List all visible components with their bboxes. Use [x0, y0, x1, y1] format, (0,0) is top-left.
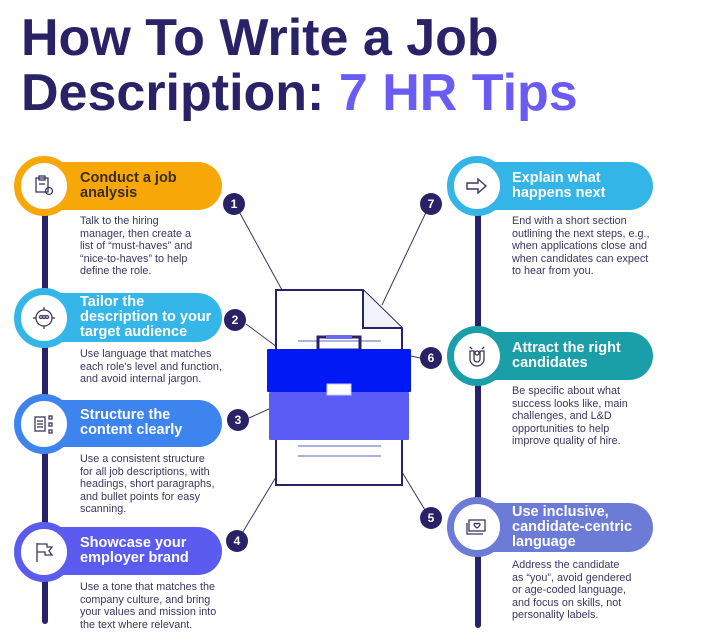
text 5: Address the candidate — [512, 559, 619, 571]
heading 6: Attract the right — [512, 340, 621, 356]
text 6: Be specific about what — [512, 385, 620, 397]
text 3: and bullet points for easy — [80, 491, 200, 503]
panel: tip 4 — [14, 522, 222, 631]
text 4: Use a tone that matches the — [80, 581, 215, 593]
text 5: as “you”, avoid gendered — [512, 572, 631, 584]
pill 1 — [34, 162, 222, 210]
text 7: when applications close and — [512, 240, 647, 252]
text 6 — [512, 385, 628, 447]
heading 2 — [80, 294, 212, 340]
text 3: Use a consistent structure — [80, 453, 205, 465]
text 5: and focus on skills, not — [512, 597, 621, 609]
heading 7: happens next — [512, 185, 605, 201]
heading 5: candidate-centric — [512, 519, 632, 535]
heading 5: language — [512, 534, 576, 550]
text 5: or age-coded language, — [512, 584, 626, 596]
text 7: End with a short section — [512, 215, 627, 227]
icon: heart card — [447, 497, 507, 557]
heading 4: Showcase your — [80, 535, 186, 551]
text 3: scanning. — [80, 503, 126, 515]
pill 5 — [467, 503, 653, 552]
heading 2: Tailor the — [80, 294, 144, 310]
text 7 — [512, 215, 649, 277]
text 7: when candidates can expect — [512, 253, 648, 265]
heading 1: Conduct a job — [80, 170, 177, 186]
title: How To Write a Job — [21, 9, 499, 67]
heading 5: Use inclusive, — [512, 504, 609, 520]
illustration: document with briefcase and numbered callouts: 2 — [232, 313, 239, 327]
text 4: your values and mission into — [80, 606, 216, 618]
heading 2: description to your — [80, 309, 211, 325]
text 2: each role's level and function, — [80, 361, 222, 373]
heading 6: candidates — [512, 355, 588, 371]
icon: magnet — [447, 326, 507, 386]
illustration: document with briefcase and numbered callouts: 3 — [235, 413, 242, 427]
pill 6 — [467, 332, 653, 380]
text 3: for all job descriptions, with — [80, 466, 210, 478]
heading 7 — [512, 170, 606, 201]
text 6: challenges, and L&D — [512, 410, 612, 422]
text 1: “nice-to-haves” to help — [80, 253, 187, 265]
text 7: to hear from you. — [512, 265, 594, 277]
text 5 — [512, 559, 631, 621]
pill 7 — [467, 162, 653, 210]
text 1: list of “must-haves” and — [80, 240, 192, 252]
title: Description: 7 HR Tips — [21, 64, 578, 122]
text 4: company culture, and bring — [80, 594, 210, 606]
right timeline line — [475, 190, 481, 628]
text 1: Talk to the hiring — [80, 215, 159, 227]
text 4 — [80, 581, 216, 631]
text 2: Use language that matches — [80, 348, 211, 360]
left timeline line — [42, 190, 48, 624]
heading 3: Structure the — [80, 407, 170, 423]
text 3: headings, short paragraphs, — [80, 478, 214, 490]
icon: arrow — [447, 156, 507, 216]
heading 3 — [80, 407, 182, 438]
text 6: improve quality of hire. — [512, 435, 621, 447]
text 1 — [80, 215, 192, 277]
text 2: and avoid internal jargon. — [80, 373, 201, 385]
panel: tip 3 — [14, 394, 222, 515]
text 7: outlining the next steps, e.g., — [512, 228, 649, 240]
heading 7: Explain what — [512, 170, 601, 186]
illustration: document with briefcase and numbered callouts: 7 — [428, 197, 435, 211]
pill 2 — [34, 293, 222, 342]
heading 2: target audience — [80, 324, 187, 340]
illustration: document with briefcase and numbered callouts: 5 — [428, 511, 435, 525]
heading 1 — [80, 170, 177, 201]
heading 5 — [512, 504, 632, 550]
text 1: manager, then create a — [80, 228, 191, 240]
panel: tip 5 — [447, 497, 653, 621]
heading 1: analysis — [80, 185, 137, 201]
illustration: document with briefcase and numbered callouts: 4 — [234, 534, 241, 548]
illustration: document with briefcase and numbered callouts: 6 — [428, 351, 435, 365]
pill 4 — [34, 527, 222, 575]
panel: tip 2 — [14, 288, 222, 385]
icon: job analysis — [14, 156, 74, 216]
text 2 — [80, 348, 222, 385]
heading 6 — [512, 340, 621, 371]
icon: structure — [14, 394, 74, 454]
panel: tip 6 — [447, 326, 653, 447]
text 5: personality labels. — [512, 609, 598, 621]
heading 3: content clearly — [80, 422, 182, 438]
heading 4: employer brand — [80, 550, 189, 566]
title — [21, 9, 578, 122]
text 4: the text where relevant. — [80, 619, 192, 631]
pill 3 — [34, 400, 222, 447]
illustration: document with briefcase and numbered callouts: 1 — [231, 197, 238, 211]
heading 4 — [80, 535, 189, 566]
icon: target audience — [14, 288, 74, 348]
panel: tip 1 — [14, 156, 222, 277]
icon: flag — [14, 522, 74, 582]
text 3 — [80, 453, 214, 515]
text 1: define the role. — [80, 265, 151, 277]
panel: tip 7 — [447, 156, 653, 277]
text 6: opportunities to help — [512, 423, 609, 435]
text 6: success looks like, main — [512, 398, 628, 410]
